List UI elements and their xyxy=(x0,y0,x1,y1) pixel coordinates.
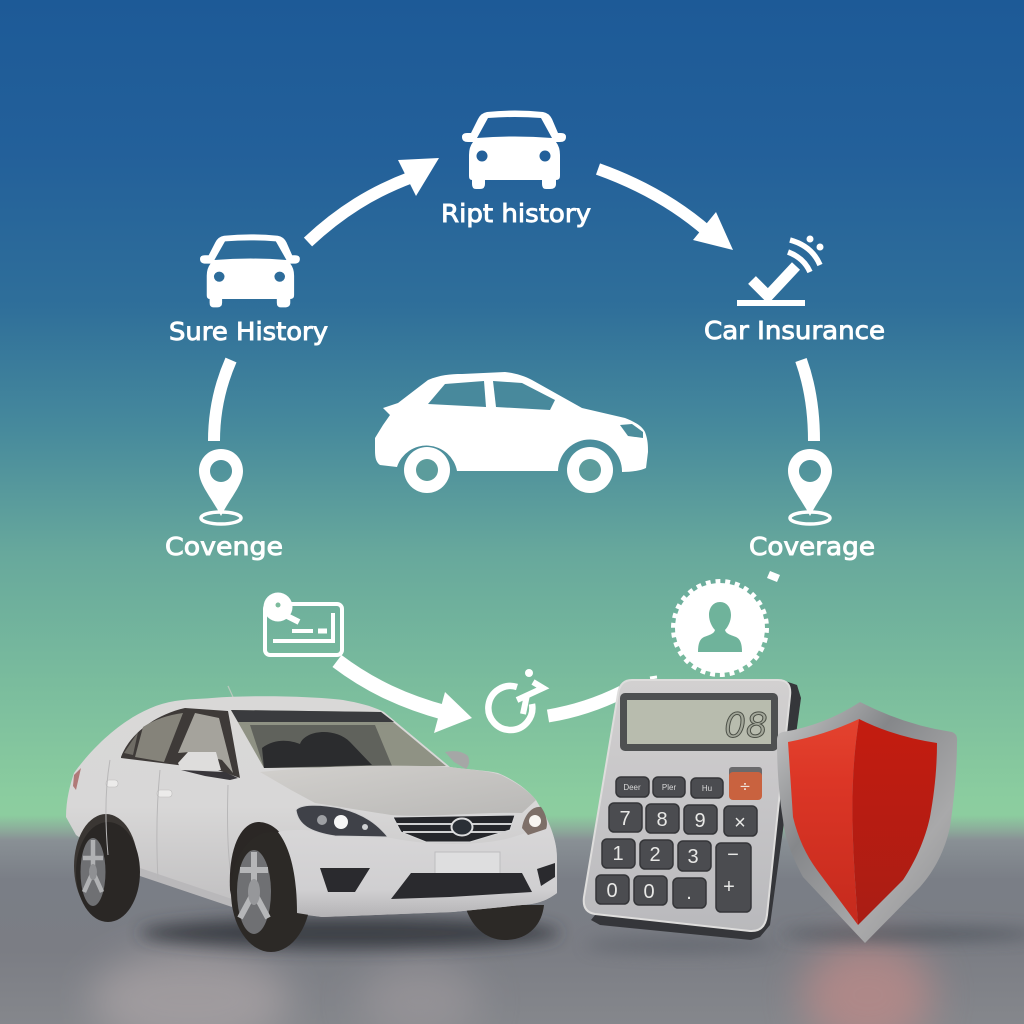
icon: check mark with signal xyxy=(737,236,824,303)
left fog intake xyxy=(320,868,370,892)
calculator body xyxy=(584,680,790,931)
icon: card with key xyxy=(264,592,342,655)
icon: left location pin xyxy=(199,449,243,524)
front left wheel xyxy=(231,832,311,952)
bumper xyxy=(278,825,557,917)
shield frame xyxy=(777,702,957,943)
number keys: 3 xyxy=(687,846,699,868)
lower intake xyxy=(391,873,532,899)
connector: left arc xyxy=(214,360,231,441)
hood xyxy=(260,766,536,816)
connector: small segment above calculator xyxy=(650,677,657,678)
shadow: under calculator xyxy=(585,937,775,953)
connector: right arc xyxy=(801,360,814,441)
number keys: 0 xyxy=(643,881,655,903)
far mirror xyxy=(445,751,469,769)
panel: insurance cycle diagram xyxy=(165,110,885,733)
rear wheel xyxy=(76,822,140,922)
grille xyxy=(393,815,515,842)
floor xyxy=(0,815,1024,1024)
number keys: × xyxy=(734,812,746,834)
windshield xyxy=(231,710,446,768)
icon: accessibility symbol xyxy=(488,669,543,730)
function keys xyxy=(616,767,762,800)
arrow: left to top xyxy=(308,158,439,242)
label: Coverage: Coverage xyxy=(749,532,875,561)
arrow: card to wheelchair xyxy=(337,661,472,733)
shield xyxy=(777,702,957,943)
reflection: car on floor xyxy=(90,950,290,1024)
sill shade xyxy=(140,868,232,907)
function keys: Deer xyxy=(623,783,641,792)
display xyxy=(620,693,778,751)
number keys: 9 xyxy=(694,810,706,832)
icon: person badge xyxy=(674,582,766,674)
shadow: right of shield xyxy=(780,928,1024,940)
number keys: 8 xyxy=(656,809,668,831)
icon: left car xyxy=(200,234,300,307)
icon: central car silhouette xyxy=(375,372,648,493)
icon: right location pin xyxy=(788,449,832,524)
shadow: under car xyxy=(140,917,560,949)
interior seats xyxy=(250,725,392,768)
display: 08 xyxy=(724,706,768,746)
rear lamp xyxy=(73,768,81,790)
windshield roof band xyxy=(231,710,394,722)
number keys: . xyxy=(686,882,692,904)
rear side window xyxy=(135,713,183,762)
label: Ript history: Ript history xyxy=(441,199,591,228)
label: Sure History: Sure History xyxy=(169,317,328,346)
right fog intake xyxy=(537,863,555,886)
number keys: − xyxy=(727,844,739,866)
number keys: 2 xyxy=(649,844,661,866)
reflection: car front on floor xyxy=(360,960,480,1024)
antenna xyxy=(228,686,233,697)
label: Covenge: Covenge xyxy=(165,532,283,561)
number keys: + xyxy=(723,876,735,898)
number keys: 0 xyxy=(606,880,618,902)
right headlight xyxy=(522,807,547,835)
number keys: 1 xyxy=(612,843,624,865)
rear arch xyxy=(74,814,138,918)
function keys: Hu xyxy=(702,784,712,793)
number keys xyxy=(596,803,757,912)
icon: top car xyxy=(462,110,566,189)
mirror xyxy=(178,752,221,770)
function keys: ÷ xyxy=(739,779,751,795)
shield left facet xyxy=(788,719,859,925)
door handles xyxy=(106,780,172,797)
function keys: Pler xyxy=(662,783,676,792)
seats xyxy=(262,732,372,768)
icon: small square mark xyxy=(767,571,780,582)
number keys: 7 xyxy=(619,808,631,830)
wheel arch front xyxy=(230,822,298,915)
front right wheel xyxy=(465,905,544,940)
side windows frame xyxy=(121,708,240,778)
label: Car Insurance: Car Insurance xyxy=(704,316,885,345)
reflection: red shield on floor xyxy=(803,940,933,1024)
connector: wheelchair to calculator xyxy=(548,692,622,716)
license plate xyxy=(435,852,500,877)
calculator side shadow xyxy=(591,681,801,940)
car body xyxy=(66,696,557,917)
door lines xyxy=(106,760,232,880)
front side window xyxy=(178,713,233,773)
shield right facet xyxy=(852,719,937,925)
car: silver sedan xyxy=(66,686,557,952)
rear quarter window xyxy=(124,732,138,755)
calculator xyxy=(584,680,801,940)
arrow: top to right xyxy=(598,169,733,250)
left headlight xyxy=(296,805,388,837)
